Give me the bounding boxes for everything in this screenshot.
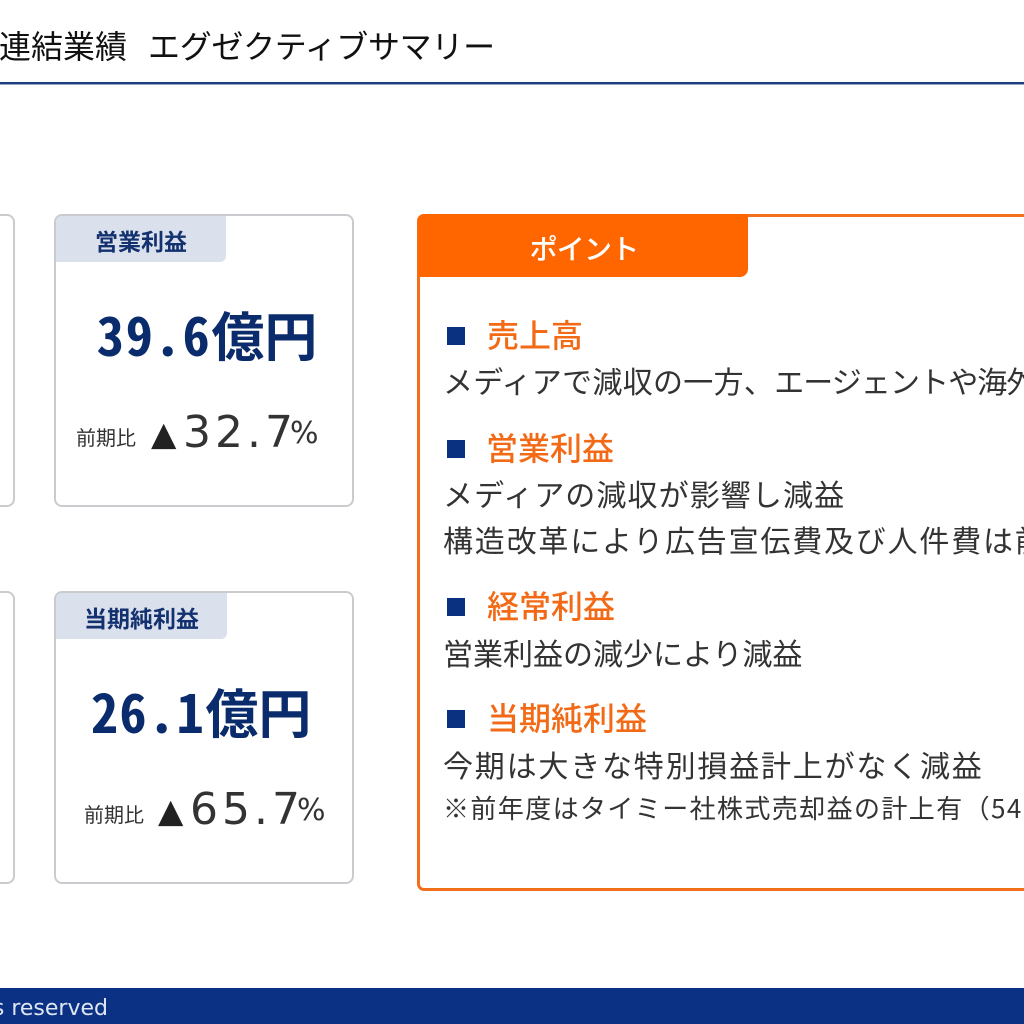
- percent sign: %: [297, 793, 326, 828]
- tag: operating profit: 営業利益: [95, 223, 187, 257]
- bullet: sales: [447, 327, 465, 345]
- change label: 前期比: [84, 799, 144, 828]
- text: ordinary profit: 営業利益の減少により減益: [443, 630, 802, 674]
- header rule: [0, 82, 1024, 85]
- panel: net profit card: [54, 591, 354, 884]
- panel: operating profit card: [54, 214, 354, 507]
- text: operating profit line 1: メディアの減収が影響し減益: [443, 471, 845, 515]
- value: net profit: 26.1億円: [91, 670, 311, 749]
- value: operating profit: 39.6億円: [97, 293, 317, 372]
- change triangle: ▲: [151, 414, 176, 453]
- change triangle: ▲: [158, 791, 183, 830]
- bullet: ordinary profit: [447, 598, 465, 616]
- bullet: net profit: [447, 710, 465, 728]
- panel: clipped card bottom: [0, 591, 15, 884]
- change number: 65.7: [190, 784, 304, 835]
- heading: net profit: 当期純利益: [487, 694, 647, 740]
- tag: operating profit: [56, 216, 226, 262]
- change number: 32.7: [183, 407, 297, 458]
- bullet: operating profit: [447, 440, 465, 458]
- title: 連結業績: [0, 22, 127, 68]
- title: エグゼクティブサマリー: [148, 22, 495, 68]
- tag: net profit: 当期純利益: [84, 600, 199, 634]
- panel: points frame: [417, 214, 1024, 891]
- tag: net profit: [56, 593, 227, 639]
- text: sales: メディアで減収の一方、エージェントや海外: [443, 358, 1024, 402]
- heading: sales: 売上高: [487, 311, 583, 357]
- text: net profit line 1: 今期は大きな特別損益計上がなく減益: [443, 742, 984, 786]
- panel heading: points tab: [418, 214, 748, 277]
- panel: clipped card top: [0, 214, 15, 507]
- text: net profit note: ※前年度はタイミー社株式売却益の計上有（54: [443, 789, 1023, 826]
- footer bar: [0, 988, 1024, 1024]
- change label: 前期比: [76, 422, 136, 451]
- panel heading: points tab: ポイント: [530, 228, 638, 268]
- heading: ordinary profit: 経常利益: [487, 582, 615, 628]
- heading: operating profit: 営業利益: [486, 424, 614, 470]
- percent sign: %: [290, 416, 319, 451]
